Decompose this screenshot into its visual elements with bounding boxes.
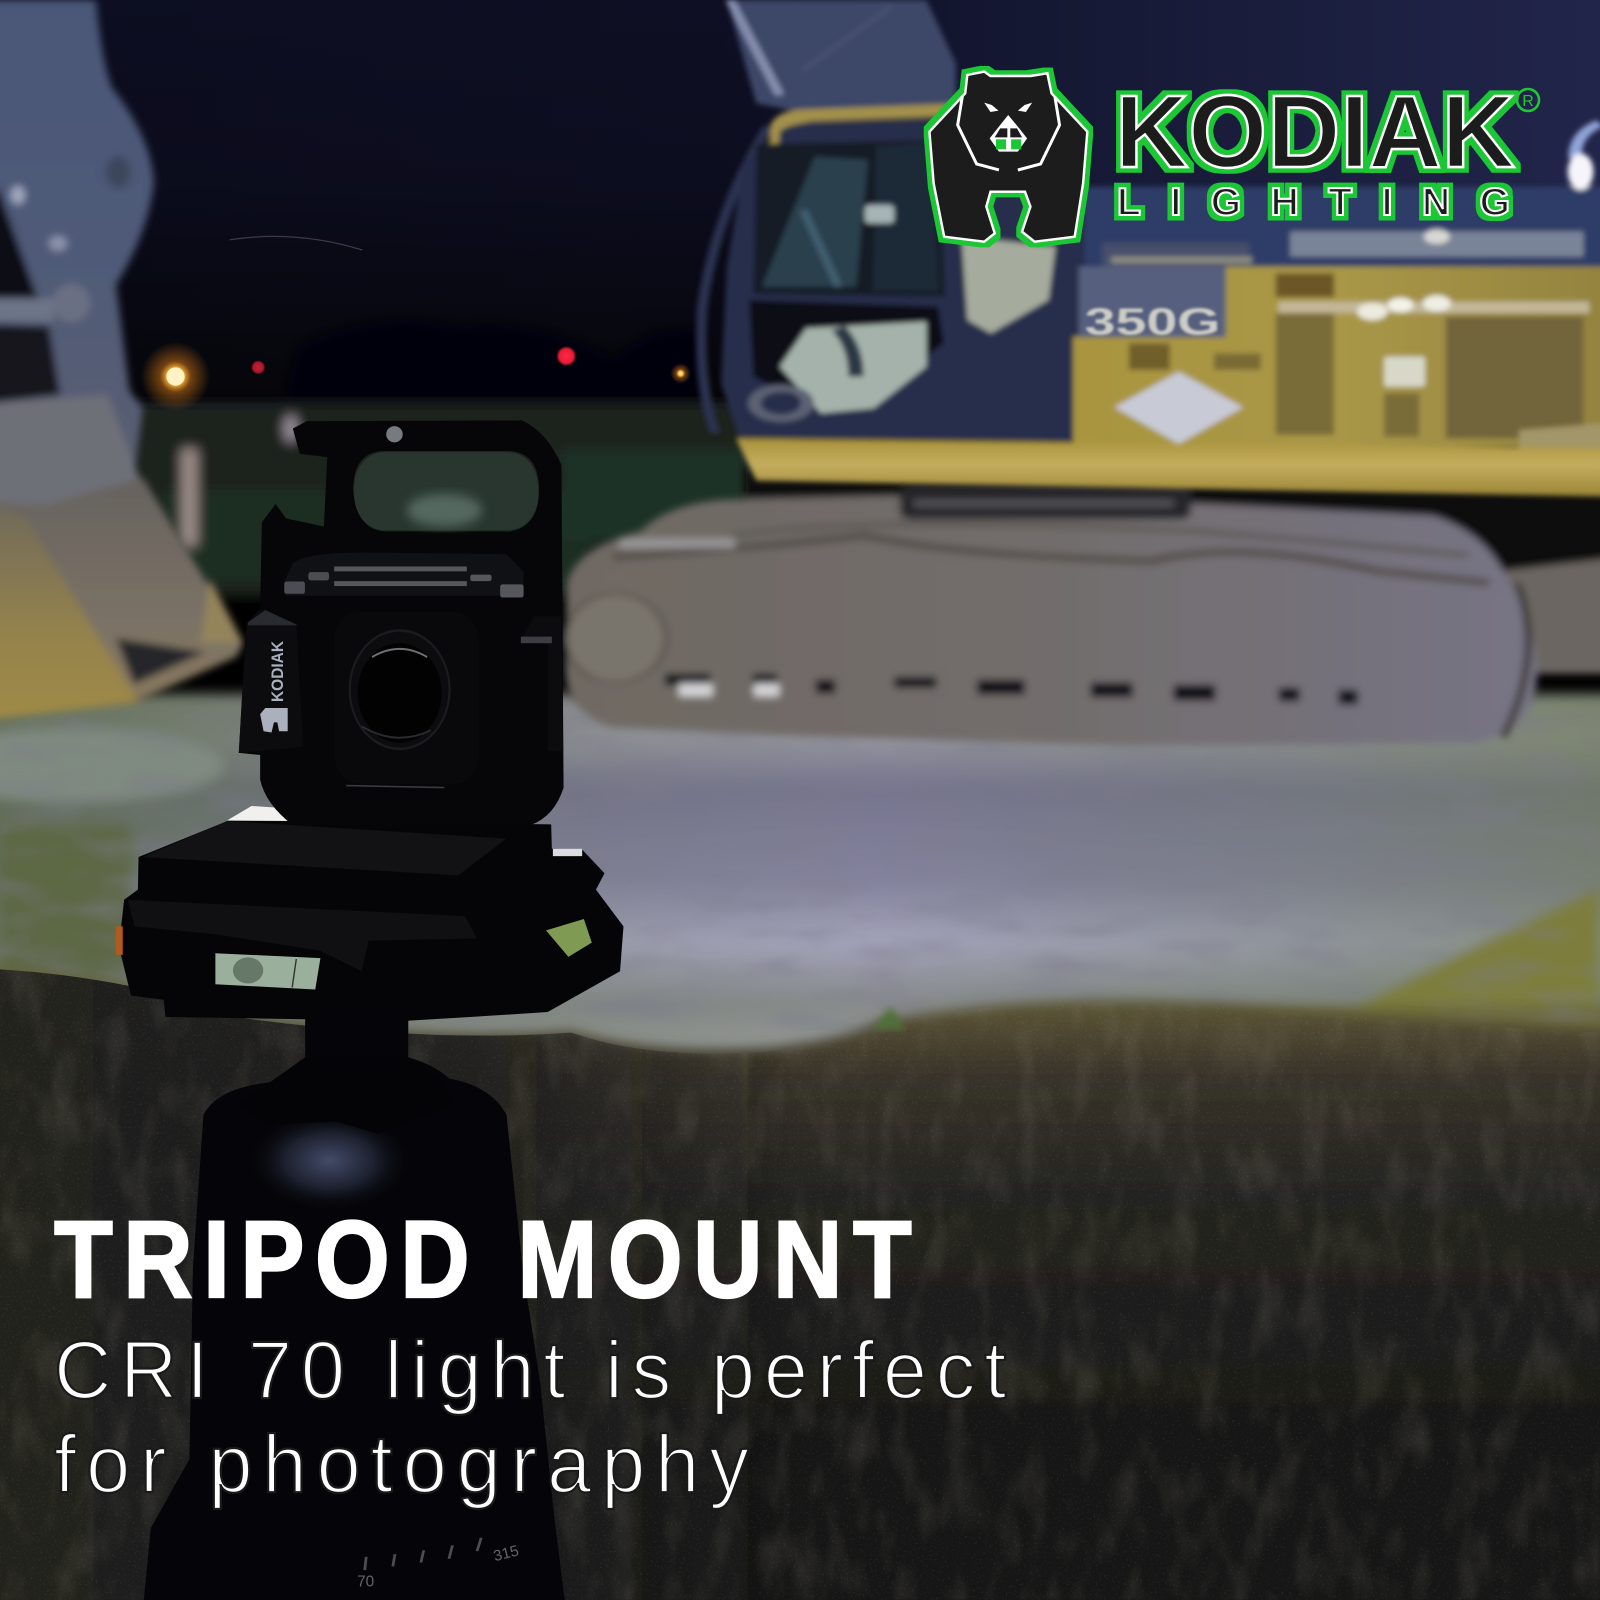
mounting plate xyxy=(116,806,623,1021)
lower yellow band xyxy=(736,438,1600,497)
bubble level front xyxy=(215,953,320,990)
excavator crawler track xyxy=(565,468,1600,746)
Kodiak Lighting logo xyxy=(929,72,1539,242)
cab xyxy=(701,127,768,433)
yellow engine housing xyxy=(1073,267,1600,447)
work lamp xyxy=(1575,123,1600,158)
tripod scale numerals xyxy=(357,1542,521,1591)
background night sky xyxy=(0,0,1600,439)
subheading: CRI 70 light is perfect xyxy=(54,1325,1006,1416)
boom xyxy=(727,0,956,110)
heading: TRIPOD MOUNT xyxy=(54,1198,912,1320)
bubble level side xyxy=(546,919,592,957)
bear mark on clip xyxy=(260,708,288,733)
gravel ground lit by the work light xyxy=(0,694,1600,1071)
grass tuft xyxy=(873,1006,906,1031)
excavator arm and bucket on left xyxy=(0,0,243,720)
bear logo xyxy=(929,72,1087,242)
KODIAK mark on clip: KODIAK xyxy=(268,640,287,702)
distant lights xyxy=(141,342,691,411)
excavator body xyxy=(701,0,1600,497)
wordmark KODIAK: KODIAK xyxy=(1115,74,1515,189)
light body xyxy=(239,420,564,825)
lens face xyxy=(334,612,479,788)
blurred horizon treeline and field xyxy=(102,320,796,597)
tripod ball head xyxy=(144,1000,565,1600)
350G model decal: 350G xyxy=(1085,301,1220,343)
tripod scale numerals: 70 xyxy=(357,1574,374,1591)
side clip xyxy=(239,609,563,753)
product: light on tripod plate xyxy=(116,420,623,1021)
registered mark xyxy=(1517,89,1539,111)
handle window view xyxy=(354,452,538,530)
subheading: for photography xyxy=(54,1419,750,1510)
tripod scale numerals: 315 xyxy=(492,1542,521,1565)
subheading xyxy=(54,1325,1006,1510)
foreground dirt bank xyxy=(0,949,1600,1600)
wordmark LIGHTING: LIGHTING xyxy=(1117,181,1510,224)
rear deck xyxy=(1085,187,1600,270)
handle screw xyxy=(386,426,403,442)
hinge and clip xyxy=(284,553,524,597)
registered mark: R xyxy=(1522,93,1534,110)
